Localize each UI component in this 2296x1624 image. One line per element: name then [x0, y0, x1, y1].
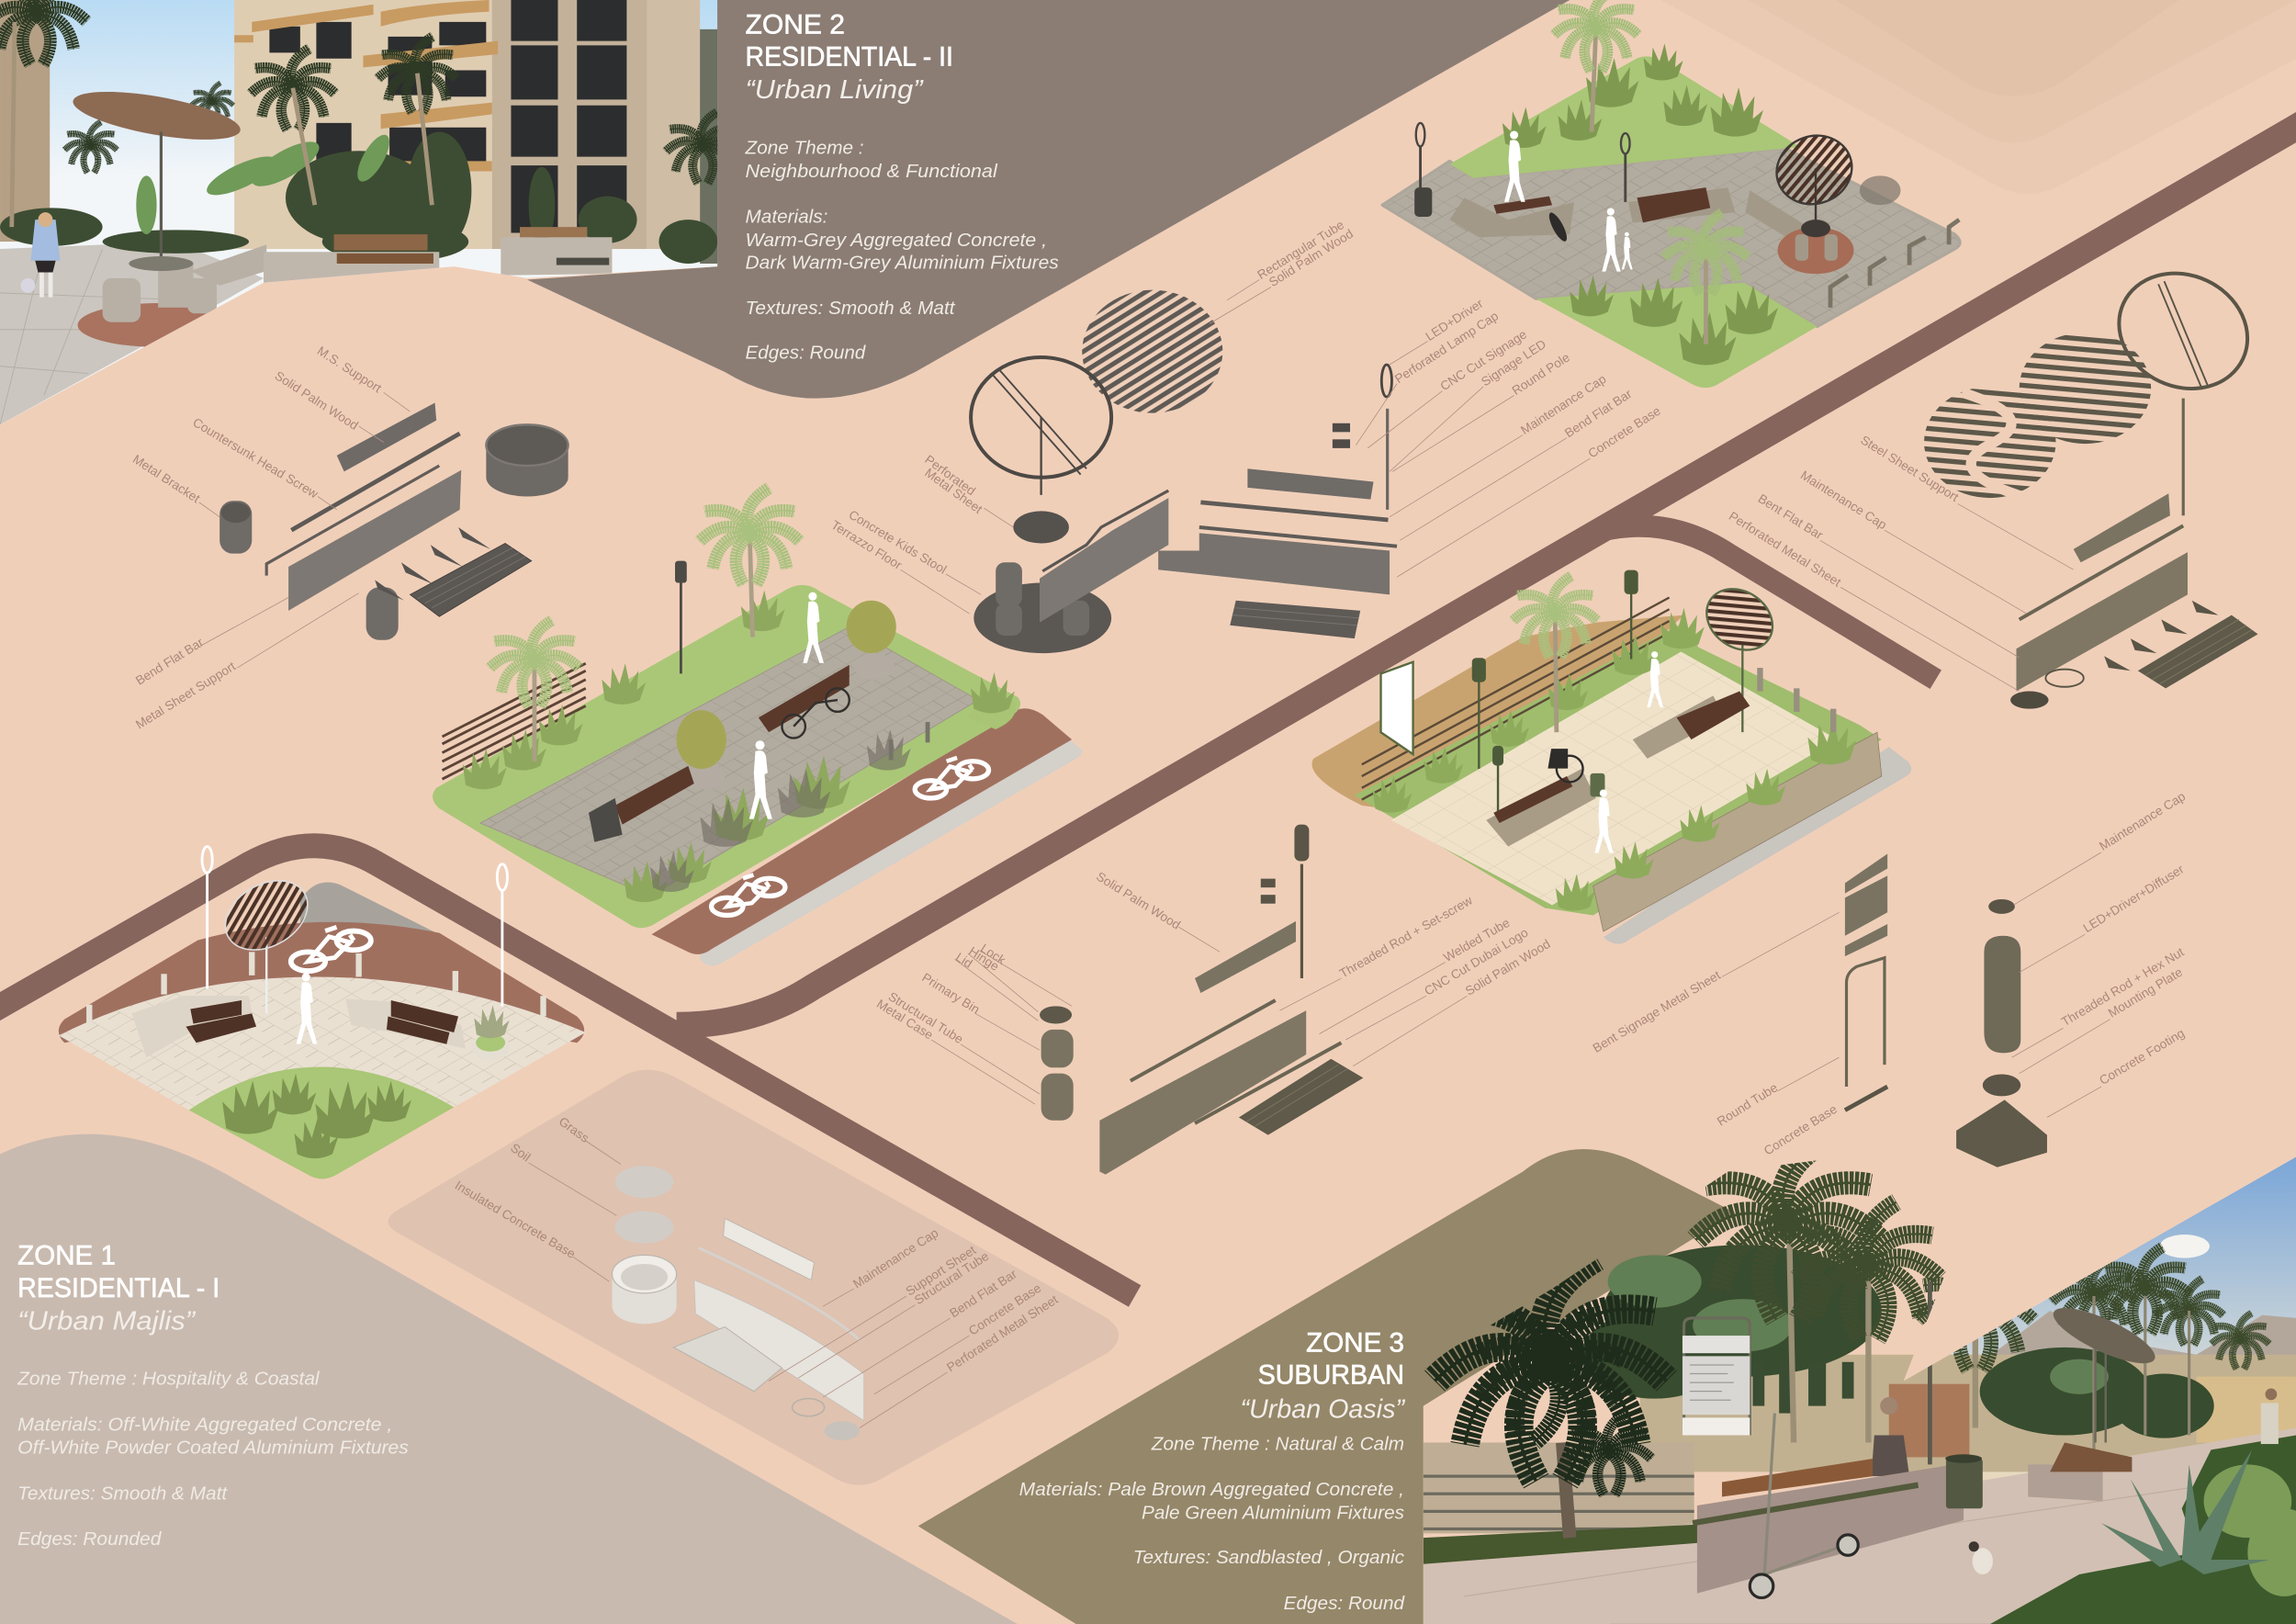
stools and table	[78, 244, 266, 347]
kids stool circle	[1778, 227, 1853, 274]
canopy	[2054, 1308, 2155, 1442]
lamp posts	[202, 847, 507, 1006]
bench concrete	[1693, 1459, 1964, 1594]
child	[20, 212, 60, 298]
fence	[1424, 1442, 1694, 1533]
callouts: Threaded Rod + Set-screw	[1337, 894, 1475, 981]
panel	[1845, 875, 1887, 936]
callouts	[828, 453, 1013, 614]
zone 2 description: Neighbourhood & Functional	[746, 161, 998, 182]
callouts: M.S. Support	[315, 344, 384, 395]
perforated screen	[213, 867, 320, 1013]
plaza: zone 2 street	[433, 484, 1082, 965]
hanging ivy	[1752, 1362, 1853, 1414]
ring frame	[971, 357, 1111, 495]
brackets	[2104, 601, 2218, 671]
exploded: residential bench	[130, 344, 568, 732]
lower tube	[1195, 1043, 1341, 1123]
plaza: zone 1 majlis	[59, 847, 586, 1179]
upper tube	[1131, 1000, 1276, 1081]
rod	[2020, 525, 2183, 619]
retaining wall	[1593, 732, 1882, 931]
sky	[1950, 1157, 2296, 1479]
seated person	[1872, 1397, 1909, 1476]
zone 1 description: Textures: Smooth & Matt	[17, 1483, 228, 1505]
paving	[59, 976, 586, 1111]
benches	[615, 665, 850, 825]
zone 3 heading: “Urban Oasis”	[1240, 1394, 1405, 1424]
seat	[1230, 601, 1360, 638]
callouts: Insulated Concrete Base	[453, 1179, 578, 1261]
green bed	[966, 696, 1016, 729]
grass disc	[615, 1166, 673, 1198]
callouts: Hinge	[966, 944, 1002, 974]
callouts: Bent Flat Bar	[1756, 491, 1826, 542]
distant palms	[2052, 1244, 2269, 1369]
perforated cap	[825, 1421, 860, 1440]
callouts: Welded Tube	[1441, 916, 1513, 964]
ring frame	[2100, 253, 2267, 410]
callouts: Bend Flat Bar	[133, 635, 206, 688]
callouts: Structural Tube	[886, 989, 966, 1046]
bollards	[1757, 668, 1836, 732]
palm	[1513, 572, 1597, 732]
perforated plate	[1013, 511, 1069, 544]
photo: zone 2 street render	[0, 0, 739, 424]
back	[1195, 921, 1296, 993]
panel: zone 1	[0, 1134, 1018, 1624]
pedestrians	[1594, 651, 1663, 853]
logo hatched disc	[1924, 387, 2056, 498]
callouts: Soil	[508, 1141, 533, 1164]
bent panel	[1040, 498, 1168, 623]
main panel	[288, 470, 461, 611]
callouts: Lock	[978, 942, 1008, 967]
benches	[1449, 187, 1808, 242]
callouts: Countersunk Head Screw	[190, 415, 321, 501]
zone 2 background shape	[527, 0, 1570, 399]
zone 2 heading	[746, 10, 953, 105]
callouts: Terrazzo Floor	[828, 518, 905, 572]
far bench	[2028, 1442, 2132, 1501]
lamp post	[675, 561, 687, 673]
zone 3 heading: ZONE 3	[1306, 1328, 1404, 1359]
handrail	[1042, 491, 1168, 571]
zone 2 description: Warm-Grey Aggregated Concrete ,	[746, 230, 1047, 251]
callouts: Perforated Lamp Cap	[1392, 309, 1501, 386]
grey dome	[300, 883, 439, 952]
shade screen	[1694, 577, 1784, 732]
callouts: Solid Palm Wood	[1266, 227, 1356, 289]
left building	[0, 0, 50, 242]
hatched disc	[1082, 290, 1222, 413]
brackets	[375, 527, 490, 601]
paving	[480, 626, 978, 897]
bench in photo	[264, 234, 439, 284]
lid	[1040, 1006, 1072, 1023]
palms	[490, 484, 800, 761]
base	[1845, 1087, 1887, 1111]
callouts: Solid Palm Wood	[1094, 869, 1183, 932]
zone 2 description: Zone Theme :	[745, 137, 864, 158]
soil disc	[615, 1212, 673, 1244]
curb	[700, 739, 1082, 965]
callouts: Metal Sheet Support	[133, 660, 238, 732]
planter base	[612, 1255, 677, 1324]
callouts: LED+Driver	[1424, 296, 1486, 344]
stools	[996, 562, 1089, 636]
zone 2 heading: ZONE 2	[746, 10, 845, 40]
sign plates	[1261, 879, 1276, 904]
concrete seats	[132, 996, 466, 1057]
roads	[0, 118, 2296, 1296]
bike lane markings	[712, 758, 989, 915]
second bench in photo	[501, 227, 612, 276]
callouts: CNC Cut Dubai Logo	[1422, 925, 1531, 998]
lamp posts	[1416, 123, 1630, 202]
panel	[1099, 1010, 1306, 1175]
callouts: Bend Flat Bar	[1562, 387, 1635, 440]
exploded: olive bench and screen	[1727, 253, 2267, 709]
zone 1 heading: “Urban Majlis”	[17, 1307, 197, 1336]
planting strip	[1424, 1525, 1697, 1564]
zone 3 heading	[1240, 1328, 1405, 1424]
tan soil bed	[1312, 615, 1684, 820]
lawn	[189, 1066, 454, 1179]
lower strip	[1845, 924, 1887, 956]
callouts: Structural Tube	[912, 1249, 992, 1307]
callouts: Rectangular Tube	[1255, 218, 1346, 282]
zone 2 description	[745, 137, 1059, 364]
zone 3 description: Zone Theme : Natural & Calm	[1151, 1433, 1404, 1454]
zone 1 heading: RESIDENTIAL - I	[17, 1273, 219, 1303]
zone 3 description: Textures: Sandblasted , Organic	[1133, 1547, 1405, 1568]
zone 3 heading: SUBURBAN	[1258, 1360, 1404, 1391]
back rest	[337, 402, 436, 471]
panel	[694, 1280, 864, 1421]
frame	[1847, 958, 1885, 1087]
decorative corner chevrons	[1660, 0, 2296, 194]
callouts: Maintenance Cap	[1518, 372, 1609, 437]
seat	[1239, 1059, 1363, 1135]
tower	[234, 0, 717, 264]
foliage	[0, 131, 717, 264]
callouts: Lid	[953, 950, 974, 971]
dog	[1969, 1541, 1993, 1574]
callouts: Bent Signage Metal Sheet	[1591, 968, 1723, 1055]
palms	[1554, 0, 1748, 344]
bottom lawn	[1536, 283, 1818, 388]
shrubs	[1503, 43, 1778, 365]
bench base	[589, 798, 623, 842]
screen shadow	[1860, 175, 1901, 205]
red pavement	[59, 922, 584, 1043]
zone 1 heading: ZONE 1	[17, 1241, 116, 1271]
callouts: Solid Palm Wood	[1463, 937, 1553, 998]
pedestrians	[749, 592, 824, 819]
zone 2 description: Dark Warm-Grey Aluminium Fixtures	[746, 253, 1059, 274]
zone 2 heading: RESIDENTIAL - II	[746, 42, 953, 73]
person walking	[2261, 1388, 2279, 1444]
cap	[2010, 692, 2049, 709]
exploded: kids stool and screen	[828, 290, 1222, 653]
wheelchair	[1549, 750, 1583, 782]
callouts: Solid Palm Wood	[273, 368, 361, 433]
photo palms	[0, 0, 739, 184]
callouts: Concrete Kids Stool	[847, 508, 949, 577]
callouts	[1210, 218, 1663, 577]
concrete footing	[1956, 1100, 2047, 1167]
back wall	[1640, 1355, 2296, 1472]
callouts: Signage LED	[1479, 337, 1548, 389]
panel: zone 2	[527, 0, 1570, 399]
zone 1 background shape	[0, 1134, 1018, 1624]
callouts: Perforated Metal Sheet	[944, 1292, 1061, 1374]
bin	[1414, 187, 1432, 217]
seat	[2138, 615, 2258, 688]
paving	[1391, 651, 1838, 905]
callouts: Bend Flat Bar	[947, 1267, 1019, 1320]
plants	[1373, 608, 1856, 911]
callouts: Threaded Rod + Hex Nut	[2059, 945, 2187, 1029]
callouts	[2012, 789, 2189, 1118]
callouts: Maintenance Cap	[850, 1225, 941, 1291]
fence	[1362, 598, 1670, 800]
fence	[443, 663, 586, 779]
bike mark	[291, 927, 371, 971]
callouts	[1727, 433, 2074, 692]
pole	[1294, 825, 1309, 978]
exploded: bollard light	[1956, 789, 2189, 1167]
bin a	[219, 501, 252, 554]
stool base	[974, 583, 1111, 653]
callouts: CNC Cut Signage	[1438, 327, 1529, 393]
benches	[186, 1000, 458, 1044]
callouts	[453, 1114, 1061, 1428]
skateboard	[1546, 210, 1570, 243]
back	[1247, 468, 1374, 500]
top lawn	[1451, 57, 1798, 177]
scooter	[1750, 1414, 1858, 1597]
zone 3 description: Pale Green Aluminium Fixtures	[1142, 1502, 1404, 1523]
right hand planting	[1990, 1435, 2296, 1624]
sign post	[1929, 1281, 1931, 1464]
ground paving	[0, 242, 264, 424]
metal case	[1041, 1074, 1074, 1121]
callouts: Metal Case	[874, 997, 936, 1043]
cap ring	[793, 1399, 825, 1416]
zone 1 description: Materials: Off-White Aggregated Concrete ,	[17, 1415, 392, 1436]
paving	[1382, 148, 1960, 327]
agave	[2101, 1449, 2269, 1574]
zone 2 description: Textures: Smooth & Matt	[746, 298, 956, 319]
panel	[2016, 552, 2188, 692]
zone 2 description: Edges: Round	[746, 343, 867, 364]
back rest	[724, 1219, 814, 1280]
zone 2 description: Materials:	[746, 206, 827, 227]
bench north	[1633, 692, 1750, 759]
lamp pole	[1381, 365, 1391, 510]
zone 3 description: Edges: Round	[1284, 1593, 1405, 1614]
zone 1 description: Off-White Powder Coated Aluminium Fixtures	[17, 1438, 409, 1459]
back	[2074, 493, 2170, 562]
zone 1 description: Zone Theme : Hospitality & Coastal	[17, 1368, 321, 1389]
photo: zone 3 street render	[1424, 1134, 2296, 1624]
callouts	[130, 344, 410, 732]
top strip	[1845, 854, 1887, 894]
callouts: Grass	[557, 1114, 591, 1145]
zone 2 heading: “Urban Living”	[746, 75, 924, 105]
planter trees	[677, 601, 896, 789]
callouts: Metal Sheet	[922, 466, 985, 516]
cloud and mountains	[1994, 1235, 2296, 1355]
exploded: pale green bench and bin	[874, 825, 1553, 1175]
callouts: Concrete Base	[1761, 1102, 1840, 1158]
callouts: Steel Sheet Support	[1858, 433, 1961, 504]
zone 3 background shape	[918, 1149, 1735, 1624]
pink backing panel	[388, 1070, 1119, 1485]
tube	[699, 1247, 860, 1340]
panel	[1158, 533, 1390, 594]
callouts: Round Pole	[1510, 350, 1572, 398]
bike lane	[652, 708, 1072, 954]
callouts: Mounting Plate	[2106, 965, 2185, 1021]
callouts: Maintenance Cap	[1798, 468, 1889, 532]
ground paving	[1424, 1428, 2296, 1624]
shrub shadows	[650, 729, 911, 892]
bollards	[86, 952, 546, 1025]
seat	[410, 544, 532, 616]
mounting plate	[1983, 1074, 2020, 1096]
planter	[471, 1005, 510, 1060]
callouts: Support Sheet	[904, 1243, 978, 1299]
pedestrian	[297, 973, 317, 1043]
callouts: Concrete Base	[966, 1280, 1044, 1338]
cap	[1988, 899, 2015, 914]
callouts: Metal Bracket	[130, 452, 202, 505]
pedestrians	[1504, 130, 1633, 272]
callouts: LED+Driver+Diffuser	[2081, 862, 2187, 935]
bollards	[889, 722, 929, 760]
panel: zone 3	[918, 1149, 1735, 1624]
body	[1984, 936, 2020, 1053]
bin	[1945, 1454, 1983, 1508]
plaza: zone 2 corner	[1382, 0, 1960, 388]
tube	[266, 466, 439, 576]
seat	[673, 1327, 782, 1392]
zone 1 heading	[17, 1241, 219, 1336]
tall palms	[1695, 1134, 2033, 1442]
hatched disc	[2020, 333, 2151, 444]
exploded: signage	[1591, 854, 1887, 1158]
lamp posts	[1473, 571, 1638, 820]
callouts: Perforated Metal Sheet	[1727, 509, 1843, 590]
callouts: Primary Bin	[919, 970, 982, 1017]
callouts	[1591, 912, 1840, 1158]
rod	[1200, 502, 1388, 520]
cap ring	[2045, 670, 2084, 687]
shade screen	[1767, 125, 1862, 237]
signage board	[1381, 662, 1413, 754]
shrubs	[463, 591, 1015, 902]
plaza: zone 3 park	[1312, 571, 1911, 944]
callouts	[874, 869, 1553, 1104]
lit shrubs	[2204, 1464, 2296, 1596]
rod	[291, 434, 460, 530]
sign plates	[1333, 423, 1350, 448]
bike	[782, 688, 850, 739]
grasses	[222, 1074, 411, 1158]
large dark palm	[1435, 1248, 1667, 1538]
callouts: Maintenance Cap	[2097, 789, 2189, 853]
bollards	[1830, 220, 1959, 308]
shade canopy	[73, 92, 241, 256]
grey base	[1604, 747, 1911, 944]
background foliage	[1581, 1245, 2214, 1438]
bench south	[1486, 769, 1596, 847]
bin b	[366, 587, 399, 640]
tube	[1199, 527, 1397, 547]
callouts: Perforated	[922, 453, 978, 498]
callouts: Concrete Footing	[2097, 1026, 2187, 1088]
zone 1 description	[17, 1368, 409, 1550]
callouts: Round Tube	[1715, 1080, 1781, 1129]
planter cylinder	[486, 424, 568, 496]
zone 3 description	[1019, 1433, 1405, 1614]
exploded: warm-grey bench	[1158, 218, 1663, 638]
green verge	[433, 585, 1020, 928]
callouts: Concrete Base	[1586, 403, 1663, 461]
green bed	[1355, 623, 1882, 915]
wayfinding sign	[1683, 1318, 1750, 1435]
pole	[2182, 399, 2184, 515]
panel: exploded majlis components	[388, 1070, 1119, 1485]
zone 1 description: Edges: Rounded	[17, 1528, 163, 1550]
primary bin	[1041, 1030, 1074, 1067]
zone 3 description: Materials: Pale Brown Aggregated Concrete ,	[1019, 1479, 1404, 1500]
bin	[1591, 773, 1604, 796]
